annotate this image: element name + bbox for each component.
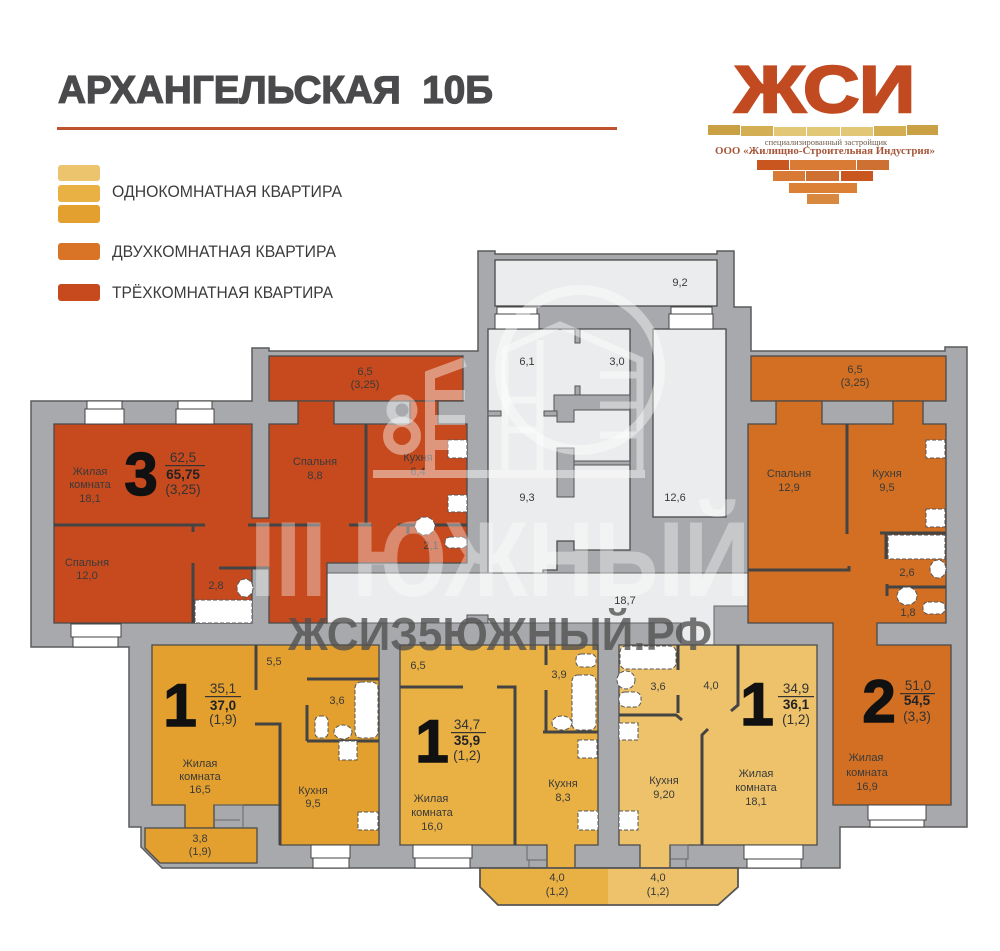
labels: комната xyxy=(179,771,222,783)
labels: Кухня xyxy=(298,785,328,797)
labels: Жилая xyxy=(73,466,107,478)
vent shafts xyxy=(214,805,243,828)
common labels: 9,3 xyxy=(519,492,535,504)
balcony xyxy=(145,828,257,863)
rooms outline xyxy=(619,645,817,868)
logo brick bar xyxy=(708,125,938,136)
labels: комната xyxy=(735,782,778,794)
labels: 34,7 xyxy=(454,717,480,732)
labels: 2 xyxy=(862,668,896,735)
balcony xyxy=(751,356,946,401)
window xyxy=(311,845,350,868)
labels: (1,2) xyxy=(453,748,481,763)
logo brick pyramid xyxy=(757,160,889,204)
plumbing and stove xyxy=(195,440,467,623)
logo caption: специализированный застройщик xyxy=(765,137,888,147)
labels: Жилая xyxy=(739,768,773,780)
labels: (3,25) xyxy=(841,377,869,389)
legend: one-room label: ОДНОКОМНАТНАЯ КВАРТИРА xyxy=(112,183,342,201)
labels: 3 xyxy=(124,441,158,508)
labels xyxy=(410,660,578,833)
legend: three-room label: ТРЁХКОМНАТНАЯ КВАРТИРА xyxy=(112,284,333,302)
partitions xyxy=(748,424,946,596)
plumbing and stove xyxy=(617,646,676,830)
labels: 1 xyxy=(415,708,449,775)
common area xyxy=(327,260,748,645)
labels: 16,5 xyxy=(189,784,211,796)
labels xyxy=(767,364,935,793)
legend: three-room swatch xyxy=(58,284,100,301)
labels: 4,0 xyxy=(703,680,719,692)
apartment: one room B xyxy=(400,645,598,868)
rooms outline xyxy=(54,401,467,623)
labels: 3,9 xyxy=(551,669,567,681)
labels: 62,5 xyxy=(170,450,196,465)
labels xyxy=(163,656,345,858)
labels: 5,5 xyxy=(266,656,282,668)
plumbing and stove xyxy=(552,654,598,830)
labels: 18,1 xyxy=(745,796,767,808)
title: АРХАНГЕЛЬСКАЯ 10Б xyxy=(58,69,493,112)
corridor xyxy=(327,573,748,645)
labels: Кухня xyxy=(548,778,578,790)
labels: Жилая xyxy=(849,752,883,764)
labels: 1,8 xyxy=(900,607,916,619)
apartment: one room C xyxy=(617,645,817,868)
balcony outline xyxy=(480,868,738,905)
labels: (1,2) xyxy=(782,712,810,727)
balcony xyxy=(269,356,463,401)
labels: 51,0 xyxy=(905,678,931,693)
labels: 9,20 xyxy=(653,789,675,801)
partitions xyxy=(255,645,379,845)
labels: 6,4 xyxy=(410,466,426,478)
legend: two-room label: ДВУХКОМНАТНАЯ КВАРТИРА xyxy=(112,243,336,261)
labels: 37,0 xyxy=(210,698,236,713)
labels: Кухня xyxy=(403,452,433,464)
balcony labels: 4,0 xyxy=(650,872,666,884)
common windows xyxy=(495,307,713,329)
labels: комната xyxy=(69,479,112,491)
legend: one-room swatches xyxy=(58,165,100,223)
labels: Жилая xyxy=(414,793,448,805)
partitions xyxy=(54,424,467,623)
labels xyxy=(649,671,814,808)
apartment: one room A xyxy=(145,645,379,868)
window xyxy=(413,845,472,868)
labels: 3,6 xyxy=(650,681,666,693)
labels: Спальня xyxy=(767,468,811,480)
labels: 18,1 xyxy=(79,493,101,505)
common labels xyxy=(519,277,688,607)
right half of balcony xyxy=(608,868,738,905)
plumbing and stove xyxy=(315,682,378,830)
common balcony xyxy=(495,260,717,306)
logo company name: ООО «Жилищно-Строительная Индустрия» xyxy=(715,146,935,157)
labels: 6,5 xyxy=(410,660,426,672)
labels: 9,5 xyxy=(305,798,321,810)
common labels: 3,0 xyxy=(609,356,625,368)
watermark: building emblem xyxy=(373,290,660,478)
labels: 8,8 xyxy=(307,470,323,482)
balcony labels: (1,2) xyxy=(546,886,568,898)
labels: 1 xyxy=(740,671,774,738)
common labels: 6,1 xyxy=(519,356,535,368)
common right room xyxy=(653,329,726,517)
labels: 3,6 xyxy=(329,695,345,707)
logo letters: ЖСИ xyxy=(734,52,915,126)
labels: 6,5 xyxy=(357,366,373,378)
watermark: III ЮЖНЫЙ: III ЮЖНЫЙ xyxy=(250,498,750,619)
labels: 2,6 xyxy=(899,567,915,579)
labels: Жилая xyxy=(183,758,217,770)
labels: 12,0 xyxy=(76,570,98,582)
vent shafts xyxy=(670,845,688,868)
labels: комната xyxy=(846,767,889,779)
labels: комната xyxy=(411,807,454,819)
labels: 6,5 xyxy=(847,364,863,376)
legend xyxy=(58,165,342,302)
labels: 35,9 xyxy=(454,733,480,748)
rooms outline xyxy=(152,645,379,845)
labels: (3,3) xyxy=(903,709,931,724)
vent shafts xyxy=(527,845,547,868)
common labels: 18,7 xyxy=(614,595,636,607)
labels: 8,3 xyxy=(555,792,571,804)
rooms outline xyxy=(748,401,951,805)
inner piers xyxy=(467,329,630,623)
balcony labels: 4,0 xyxy=(549,872,565,884)
labels: 9,5 xyxy=(879,482,895,494)
labels: Спальня xyxy=(65,557,109,569)
labels xyxy=(65,366,439,592)
partitions xyxy=(619,645,738,845)
windows xyxy=(71,401,214,647)
labels: (3,25) xyxy=(165,482,201,497)
common labels: 12,6 xyxy=(664,492,686,504)
partitions xyxy=(400,645,598,845)
labels: 54,5 xyxy=(904,693,931,708)
labels: 16,0 xyxy=(421,821,443,833)
building walls xyxy=(31,251,967,868)
labels: 16,9 xyxy=(856,781,878,793)
labels: 65,75 xyxy=(166,467,200,482)
logo xyxy=(708,52,938,204)
labels: Кухня xyxy=(872,468,902,480)
labels: 2,1 xyxy=(423,540,439,552)
floor plan xyxy=(31,251,967,905)
legend: two-room swatch xyxy=(58,243,100,260)
common left room xyxy=(488,329,630,575)
balcony labels xyxy=(546,872,669,898)
common labels: 9,2 xyxy=(672,277,688,289)
labels: 3,8 xyxy=(192,833,208,845)
labels: Спальня xyxy=(293,456,337,468)
left half of balcony xyxy=(480,868,608,905)
watermark: website: ЖСИЗ5ЮЖНЫЙ.РФ xyxy=(287,608,712,660)
labels: 1 xyxy=(163,672,197,739)
window xyxy=(744,845,803,868)
labels: 34,9 xyxy=(783,681,809,696)
labels: 36,1 xyxy=(783,697,810,712)
title underline xyxy=(57,127,617,130)
labels: 2,8 xyxy=(208,580,224,592)
rooms outline xyxy=(400,645,598,868)
shared bay balcony xyxy=(480,868,738,905)
labels: 12,9 xyxy=(778,482,800,494)
labels: 35,1 xyxy=(210,681,236,696)
plumbing and stove xyxy=(888,440,946,614)
apartment: three rooms xyxy=(54,356,467,647)
labels: Кухня xyxy=(649,775,679,787)
labels: (1,9) xyxy=(209,712,237,727)
apartment: two rooms xyxy=(748,356,951,827)
labels: (3,25) xyxy=(351,379,379,391)
window xyxy=(868,805,926,827)
labels: (1,9) xyxy=(189,846,211,858)
balcony labels: (1,2) xyxy=(647,886,669,898)
